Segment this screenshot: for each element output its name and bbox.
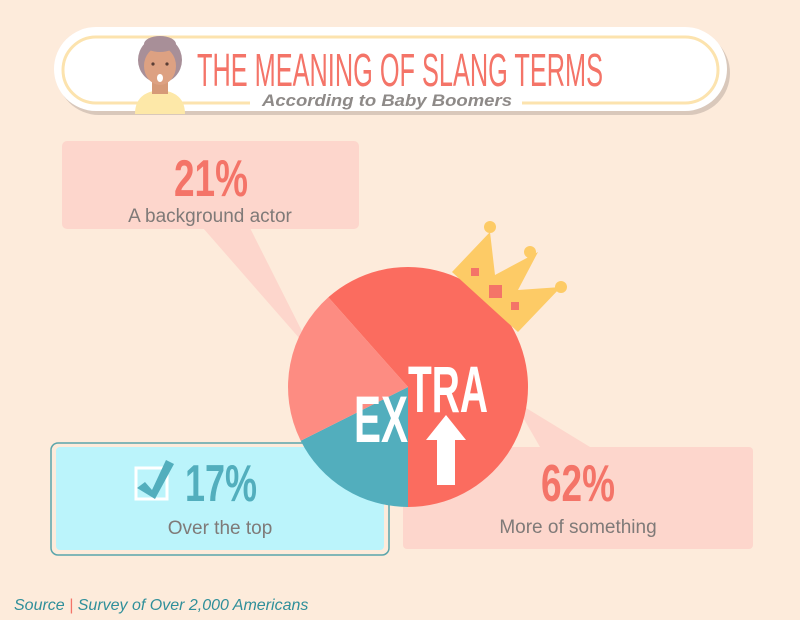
callout: 62% more of something: More of something	[499, 517, 657, 538]
label: EXTRA: EX	[354, 382, 408, 456]
icon: up arrow	[426, 415, 466, 485]
icon: grandmother	[135, 36, 185, 114]
callout: 17% over the top: Over the top	[168, 518, 272, 539]
pie chart: TRA	[408, 352, 488, 426]
header banner	[54, 27, 730, 115]
icon: checkbox	[136, 460, 174, 499]
callout: 62% more of something	[403, 400, 753, 549]
icon: crown	[452, 221, 567, 332]
source: Source | Survey of Over 2,000 Americans	[14, 597, 308, 614]
callout: 62% more of something: 62%	[541, 455, 615, 513]
callout: 17% over the top	[51, 443, 389, 555]
callout: 21% background actor	[62, 141, 359, 355]
subtitle: According to Baby Boomers	[261, 91, 512, 110]
callout: 17% over the top: 17%	[185, 455, 257, 513]
callout: 21% background actor: A background actor	[128, 206, 293, 227]
callout: 21% background actor: 21%	[174, 150, 248, 208]
pie chart	[288, 221, 567, 507]
